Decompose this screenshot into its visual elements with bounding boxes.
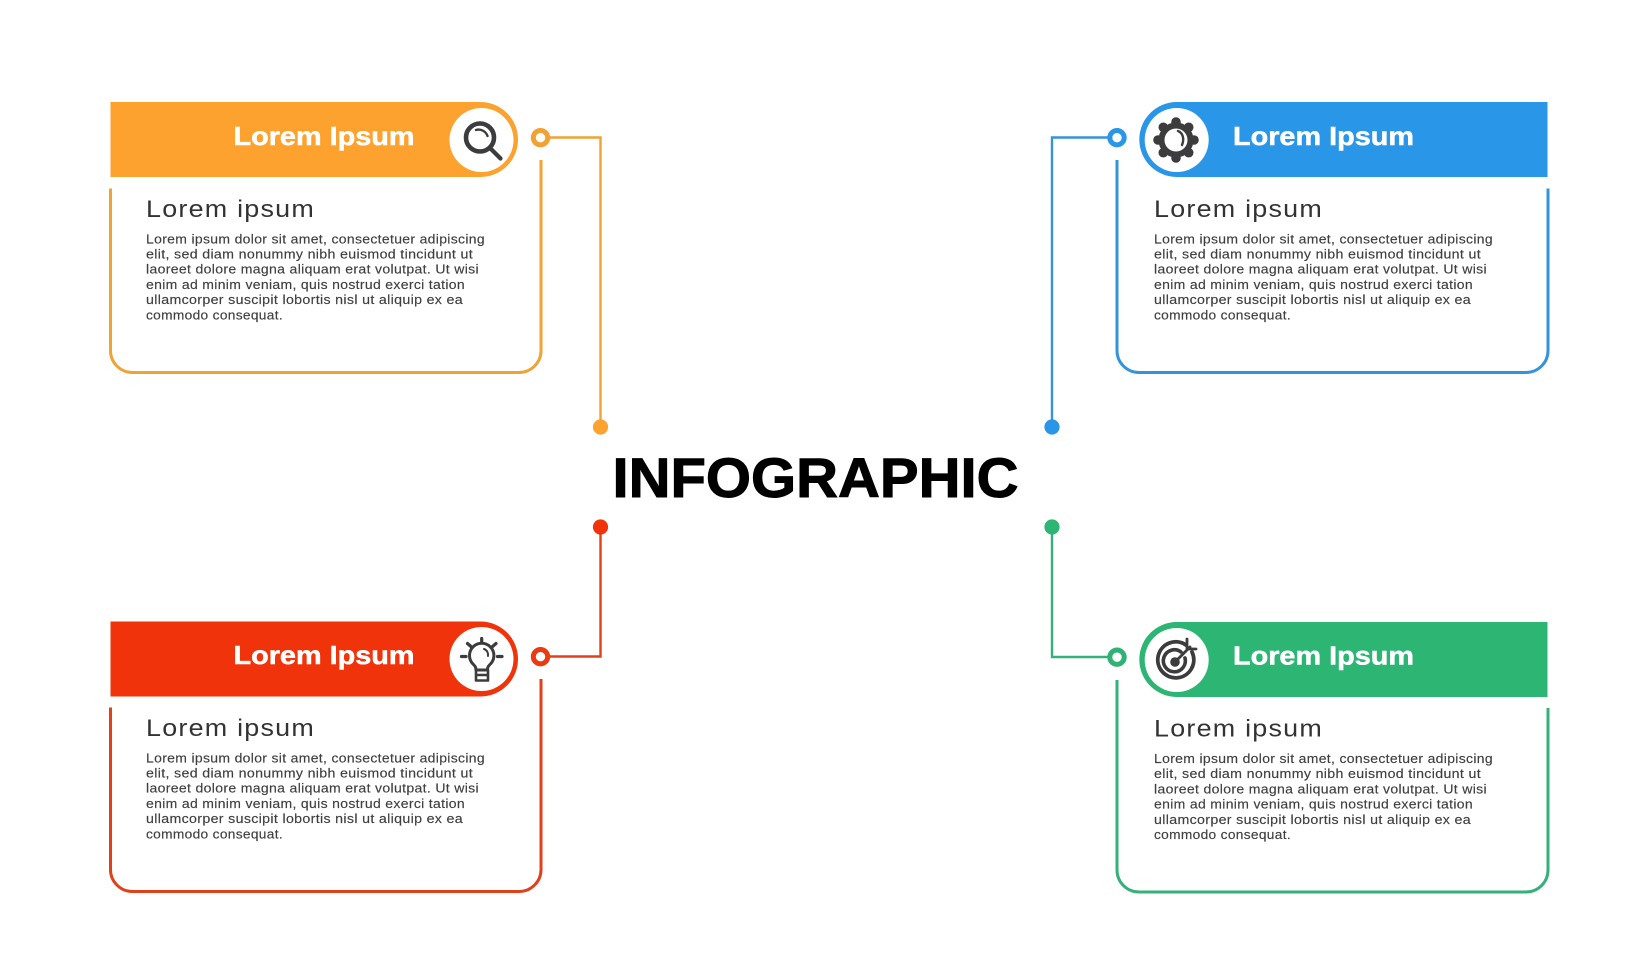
panel: orange top-left (110, 102, 608, 435)
panel: blue top-right (1044, 102, 1548, 435)
connector: orange (533, 130, 608, 435)
body text: enim ad minim veniam, quis nostrud exerci tation (146, 277, 465, 292)
icon: light bulb (450, 627, 514, 691)
title: INFOGRAPHIC (612, 446, 1018, 509)
body text: ullamcorper suscipit lobortis nisl ut aliquip ex ea (1154, 292, 1472, 307)
subheading: Lorem ipsum (146, 715, 315, 742)
header text: Lorem Ipsum (1233, 121, 1414, 151)
body text: ullamcorper suscipit lobortis nisl ut aliquip ex ea (146, 811, 464, 826)
body text: commodo consequat. (1154, 827, 1291, 842)
body text: Lorem ipsum dolor sit amet, consectetuer adipiscing (146, 231, 485, 246)
connector: blue (1044, 130, 1124, 435)
body text: laoreet dolore magna aliquam erat volutpat. Ut wisi (146, 781, 479, 796)
header banner: blue (1139, 102, 1548, 177)
connector: red (533, 519, 608, 664)
subheading: Lorem ipsum (1154, 716, 1323, 742)
subheading: Lorem ipsum (1154, 196, 1323, 223)
header banner: red (110, 622, 518, 696)
body text: enim ad minim veniam, quis nostrud exerci tation (1154, 277, 1473, 292)
box outline: green (1117, 680, 1548, 892)
icon: magnifier (450, 108, 514, 172)
body text (146, 231, 485, 322)
connector: green (1044, 519, 1124, 664)
body text: laoreet dolore magna aliquam erat volutpat. Ut wisi (1154, 262, 1487, 277)
box outline: orange (110, 160, 541, 373)
subheading: Lorem ipsum (146, 196, 315, 223)
body text: laoreet dolore magna aliquam erat volutpat. Ut wisi (146, 262, 479, 277)
body text: elit, sed diam nonummy nibh euismod tincidunt ut (146, 246, 473, 262)
body text: commodo consequat. (146, 307, 283, 322)
body text: elit, sed diam nonummy nibh euismod tincidunt ut (1154, 766, 1481, 781)
body text: Lorem ipsum dolor sit amet, consectetuer adipiscing (146, 750, 485, 765)
body text: enim ad minim veniam, quis nostrud exerci tation (1154, 797, 1473, 812)
body text: laoreet dolore magna aliquam erat volutpat. Ut wisi (1154, 781, 1487, 796)
panel: green bottom-right (1044, 519, 1548, 892)
body text: commodo consequat. (146, 826, 283, 841)
panel: red bottom-left (110, 519, 608, 892)
body text: Lorem ipsum dolor sit amet, consectetuer adipiscing (1154, 231, 1493, 246)
icon: gear (1145, 108, 1209, 172)
body text: commodo consequat. (1154, 307, 1291, 322)
header banner: orange (110, 102, 518, 177)
body text (1154, 231, 1493, 322)
header text: Lorem Ipsum (234, 121, 414, 151)
body text: elit, sed diam nonummy nibh euismod tincidunt ut (146, 766, 473, 780)
box outline: red (110, 679, 541, 892)
body text: enim ad minim veniam, quis nostrud exerci tation (146, 796, 465, 811)
header text: Lorem Ipsum (1233, 640, 1414, 670)
body text (146, 750, 485, 841)
box outline: blue (1117, 160, 1548, 373)
header banner: green (1139, 622, 1548, 697)
body text: ullamcorper suscipit lobortis nisl ut aliquip ex ea (1154, 812, 1472, 827)
header text: Lorem Ipsum (234, 640, 414, 670)
icon: target (1145, 628, 1209, 692)
body text (1154, 751, 1493, 842)
body text: ullamcorper suscipit lobortis nisl ut aliquip ex ea (146, 292, 464, 307)
body text: elit, sed diam nonummy nibh euismod tincidunt ut (1154, 246, 1481, 262)
body text: Lorem ipsum dolor sit amet, consectetuer adipiscing (1154, 751, 1493, 766)
